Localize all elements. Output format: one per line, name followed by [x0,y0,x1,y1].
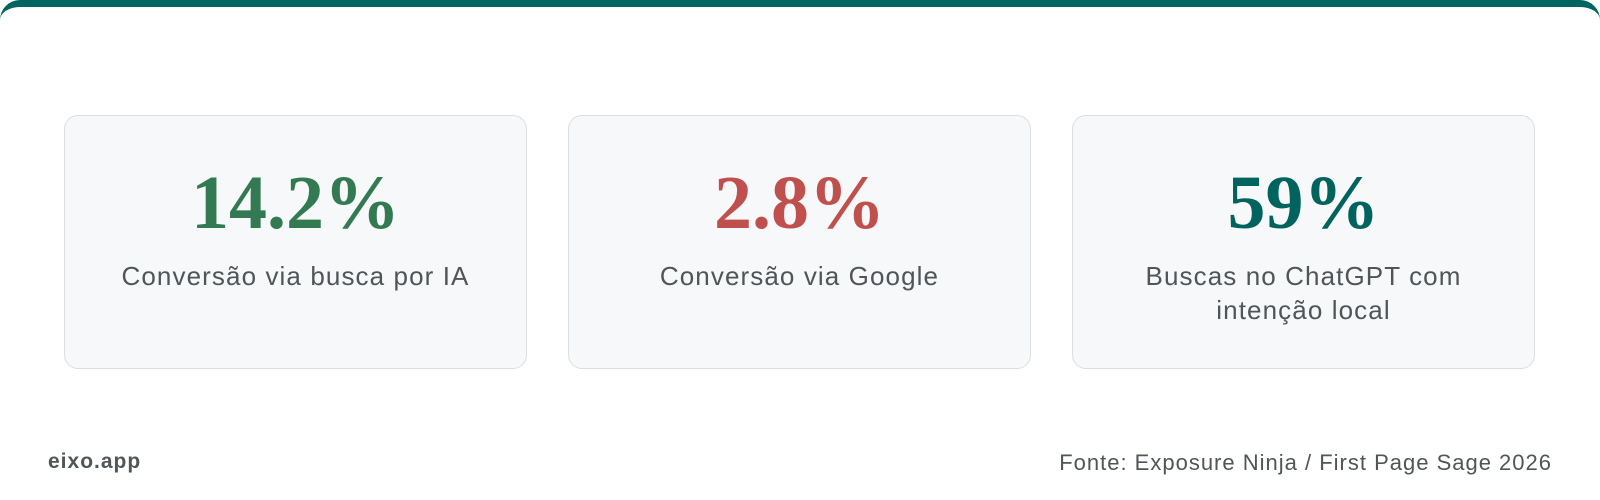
label: ChatGPT local intent [1146,261,1461,325]
number: 14.2%: 14.2% [191,161,400,245]
card: ChatGPT local intent [1072,115,1535,369]
label: ChatGPT local intent: Buscas no ChatGPT com [1146,261,1461,291]
label: Google conversion: Conversão via Google [660,261,939,291]
card: AI conversion [64,115,527,369]
label: AI conversion: Conversão via busca por IA [122,261,470,291]
footer brand: eixo.app [48,450,141,473]
number: 59%: 59% [1228,161,1380,245]
card: Google conversion [568,115,1031,369]
footer source: Fonte: Exposure Ninja / First Page Sage 2026 [1059,450,1552,475]
label: ChatGPT local intent: intenção local [1216,295,1391,325]
number: 2.8%: 2.8% [714,161,885,245]
